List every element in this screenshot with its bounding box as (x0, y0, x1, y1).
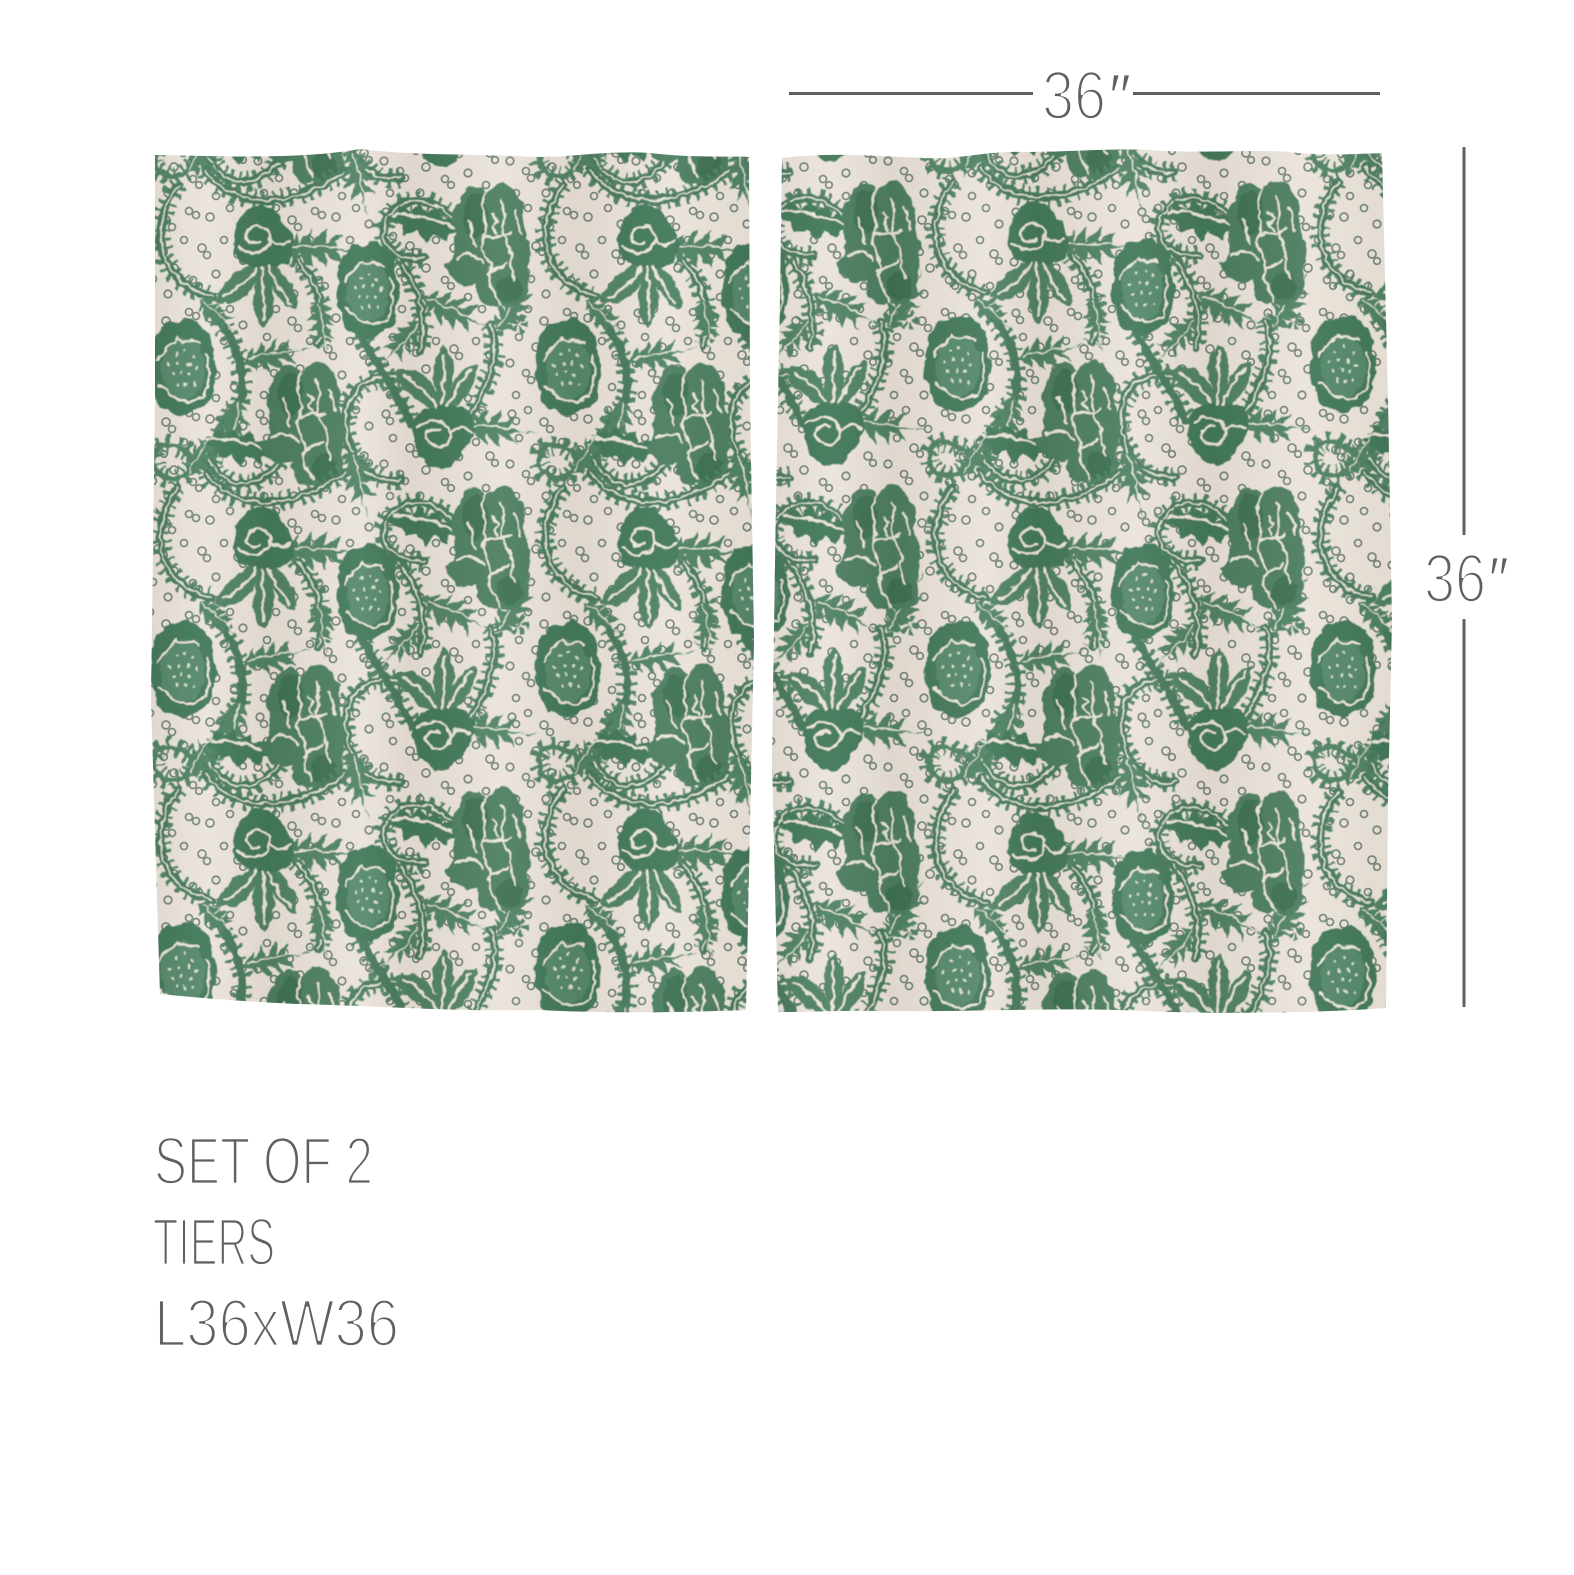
width dimension: 36 inches: 36 (1042, 57, 1106, 134)
product text: set, type and size: L36xW36 (154, 1286, 399, 1361)
height dimension: 36 inches (1424, 147, 1508, 1007)
product text: set, type and size: SET OF 2 (154, 1124, 373, 1199)
product text: set, type and size: TIERS (153, 1205, 275, 1280)
width dimension: 36 inches: ″ (1106, 61, 1130, 133)
width dimension: 36 inches (789, 57, 1380, 134)
product text: set, type and size (153, 1124, 399, 1361)
height dimension: 36 inches: ″ (1486, 544, 1508, 616)
panel: left curtain tier with green floral print (0, 0, 933, 1091)
panel: right curtain tier with green floral print (772, 150, 1392, 1013)
height dimension: 36 inches: 36 (1424, 540, 1486, 617)
